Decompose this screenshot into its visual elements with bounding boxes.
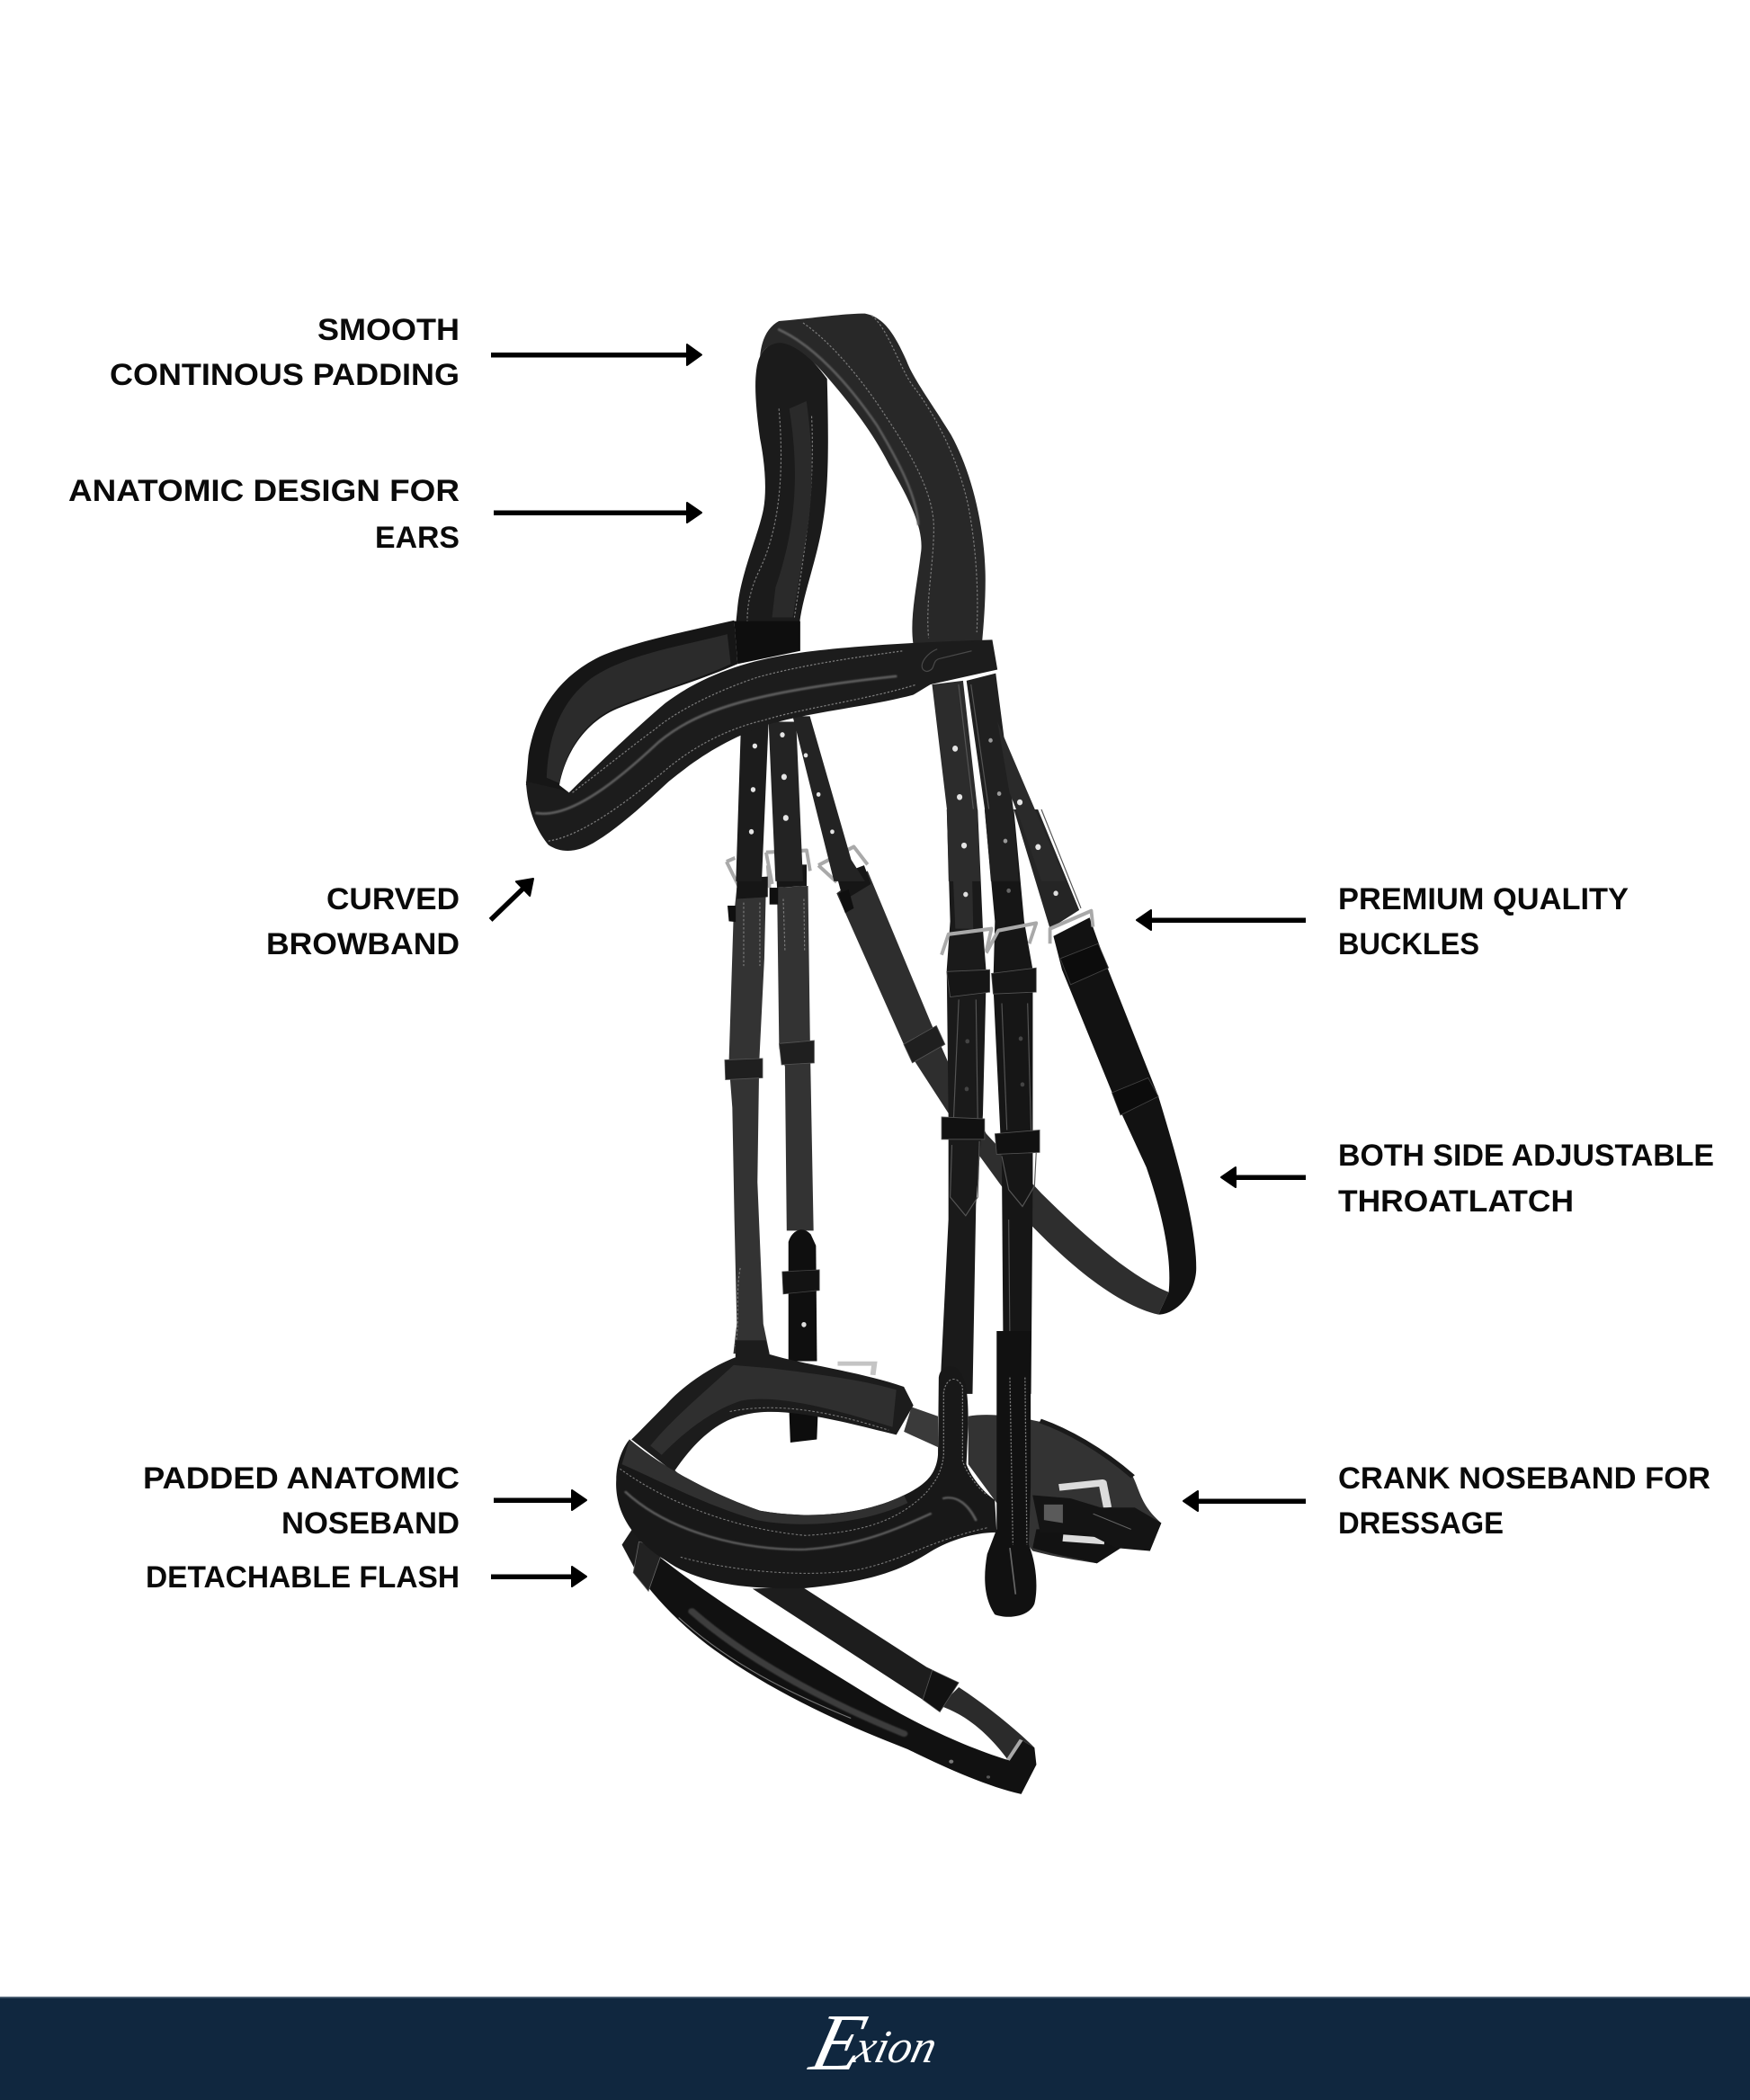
keeper A [725, 1059, 763, 1080]
keeper B [779, 1041, 814, 1065]
callout: premium quality buckles [1338, 882, 1629, 961]
callout: padded anatomic noseband [143, 1461, 460, 1541]
ear padding [736, 342, 828, 623]
flash keeper [923, 1670, 959, 1712]
throatlatch right strap [1053, 917, 1196, 1315]
browband logo emboss [922, 649, 971, 672]
callout: anatomic design for ears: ANATOMIC DESIGN FOR [68, 474, 460, 508]
strap holes [749, 732, 1040, 850]
callout: smooth continuous padding: CONTINOUS PADDING [110, 358, 460, 392]
callout: anatomic design for ears [68, 474, 460, 555]
callout: crank noseband for dressage: DRESSAGE [1338, 1506, 1504, 1541]
callout: premium quality buckles: BUCKLES [1338, 927, 1479, 961]
left cheek strap lower [729, 884, 770, 1354]
middle cheek strap lower [777, 886, 814, 1230]
arrow: browband [484, 871, 540, 927]
padded buckle [837, 1363, 874, 1375]
front noseband [616, 1366, 996, 1588]
callout: detachable flash: DETACHABLE FLASH [146, 1560, 460, 1595]
callout: curved browband [266, 882, 460, 961]
throatlatch lower strap [836, 871, 1169, 1315]
throatlatch upper strap [1013, 809, 1079, 929]
callout: premium quality buckles: PREMIUM QUALITY [1338, 882, 1629, 916]
callout: anatomic design for ears: EARS [375, 521, 460, 555]
left buckles [727, 858, 770, 888]
throatlatch keepers [1060, 943, 1109, 985]
headpiece, browband and upper straps [526, 314, 1066, 881]
arrow: flash [491, 1567, 586, 1586]
flash loop [633, 1541, 664, 1591]
callout: curved browband: CURVED [326, 882, 460, 916]
throatlatch buckle [1050, 911, 1093, 943]
right keepers [947, 970, 990, 996]
crown keeper [734, 621, 800, 664]
callout: crank noseband for dressage: CRANK NOSEBAND FOR [1338, 1461, 1710, 1496]
right cheek strap D [940, 809, 987, 1394]
upper straps [736, 722, 769, 881]
logo: Exion: xion [848, 2022, 942, 2073]
connector strap [904, 1407, 938, 1447]
flash tab [789, 1229, 817, 1361]
right cheek strap E [985, 809, 1032, 1394]
footer band [0, 1997, 1750, 2100]
callout: both side adjustable throatlatch: BOTH SIDE ADJUSTABLE [1338, 1139, 1714, 1173]
flash upper strap [753, 1586, 959, 1712]
flash back tail [622, 1524, 647, 1569]
arrow: noseband [494, 1490, 586, 1510]
callout: padded anatomic noseband: NOSEBAND [281, 1506, 460, 1541]
chin pad [969, 1415, 1161, 1563]
callout: crank noseband for dressage [1338, 1461, 1710, 1541]
flash buckle edge [1008, 1740, 1022, 1760]
crank buckle [1059, 1483, 1108, 1507]
callout: padded anatomic noseband: PADDED ANATOMIC [143, 1461, 460, 1496]
third strap keeper [904, 1025, 945, 1063]
flash long strap [635, 1545, 1036, 1794]
left strap ends [737, 877, 768, 898]
flash tab under padding [789, 1393, 818, 1443]
arrow: ears [494, 503, 701, 523]
upper padded noseband [631, 1340, 914, 1486]
arrow: throatlatch [1221, 1167, 1306, 1187]
crank strap [1032, 1496, 1161, 1551]
bridle product illustration [526, 314, 1196, 1794]
callout: smooth continuous padding [110, 313, 460, 392]
crown front leather [760, 314, 986, 643]
browband front [526, 639, 997, 851]
right buckles [942, 929, 992, 955]
callout: smooth continuous padding: SMOOTH [317, 313, 460, 347]
arrow: buckles [1137, 910, 1306, 930]
long cheek strap and tip [985, 1331, 1036, 1617]
callout: both side adjustable throatlatch [1338, 1139, 1714, 1219]
logo: Exion: E [803, 1997, 875, 2087]
arrow: padding [491, 344, 701, 365]
callout: curved browband: BROWBAND [266, 927, 460, 961]
arrow: crank noseband [1183, 1491, 1306, 1511]
noseband and flash [616, 1331, 1161, 1794]
callout: both side adjustable throatlatch: THROATLATCH [1338, 1184, 1574, 1219]
throatlatch strap and straps, middle section [725, 809, 1196, 1394]
browband padded back [526, 621, 737, 792]
